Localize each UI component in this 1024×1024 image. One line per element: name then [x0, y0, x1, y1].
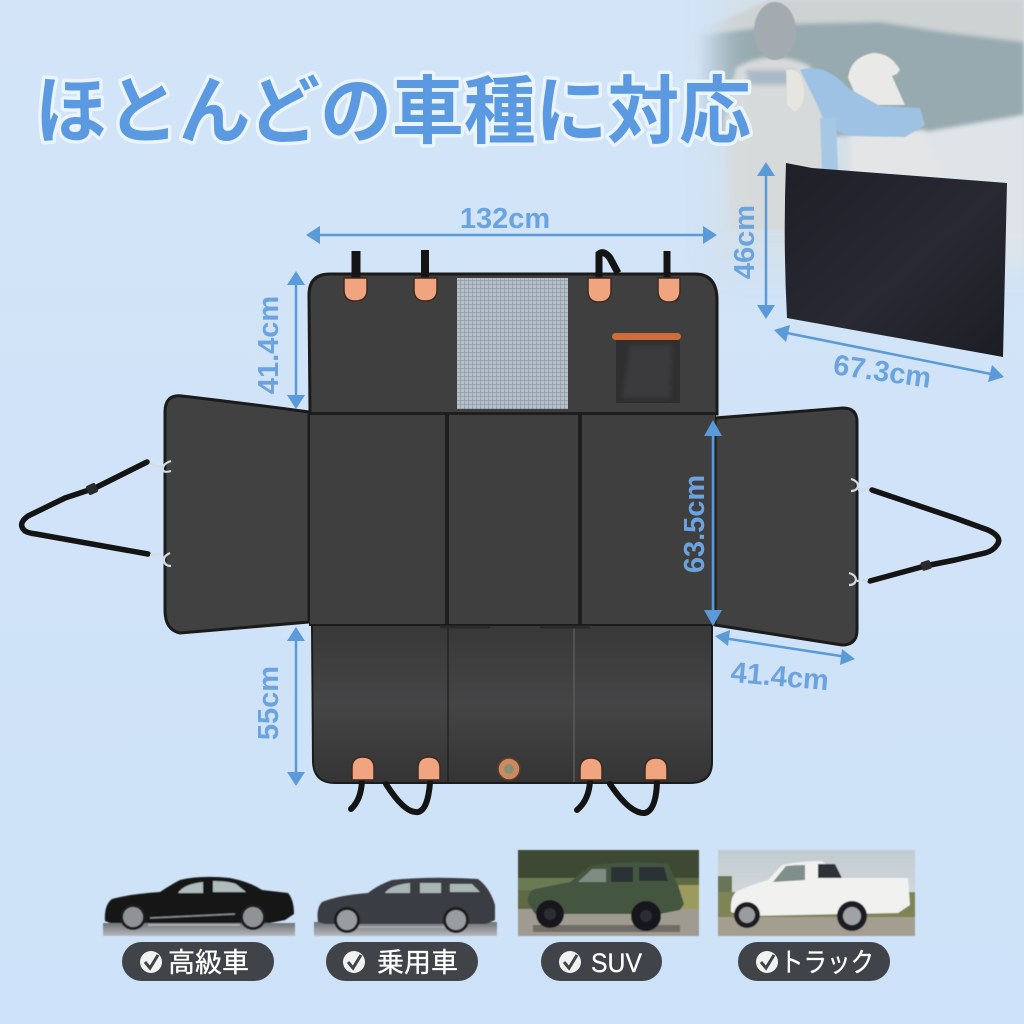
dimension: upper height 41.4cm: 41.4cm	[253, 296, 285, 394]
dimension: width 132cm: 132cm	[460, 203, 550, 235]
mesh window	[457, 278, 568, 409]
sleeve	[800, 68, 925, 137]
storage pocket	[612, 333, 681, 403]
badge: SUV	[541, 942, 662, 981]
check icon	[140, 951, 162, 973]
dog head	[848, 53, 905, 105]
round logo tab	[498, 758, 520, 780]
dimension: bag width 67.3cm: 67.3cm	[831, 349, 933, 395]
badge: truck: トラック	[780, 948, 874, 978]
folded storage bag	[785, 163, 1007, 357]
dimension: width 132cm	[306, 203, 717, 244]
badge: passenger car	[326, 942, 478, 981]
badge: luxury car: 高級車	[168, 948, 249, 978]
dimension: seat height 63.5cm	[679, 420, 722, 626]
dimension: bottom length 55cm	[253, 627, 305, 786]
light ground	[900, 115, 1024, 320]
upper peach tabs	[344, 278, 680, 302]
badge: SUV: SUV	[591, 948, 642, 978]
dark forest	[700, 22, 1024, 140]
dimension: bag width 67.3cm	[774, 325, 1004, 395]
car photo: station wagon	[314, 878, 497, 936]
seat cover mat	[22, 250, 999, 813]
car photo: pickup truck	[718, 850, 915, 936]
top back panel	[309, 250, 717, 414]
dog body	[848, 128, 927, 176]
car photo: SUV	[518, 850, 699, 936]
badge: truck	[738, 942, 890, 981]
car photo: luxury sedan	[103, 877, 295, 936]
dimension: flap width 41.4cm	[715, 630, 855, 697]
left side flap	[165, 396, 309, 633]
photo: hiker with dog, faded	[701, 0, 1024, 264]
far hill	[714, 0, 1024, 42]
seat panels	[309, 412, 716, 626]
right side flap	[715, 408, 857, 645]
left side strap with hooks	[22, 461, 171, 566]
bottom panel	[312, 625, 712, 813]
check icon	[343, 951, 365, 973]
check icon	[559, 951, 581, 973]
backpack and torso	[722, 56, 824, 230]
dimension: bag height 46cm	[729, 162, 775, 319]
dimension: bottom length 55cm: 55cm	[253, 666, 285, 740]
hanging strap	[820, 118, 838, 170]
dimension: upper height 41.4cm	[253, 271, 305, 409]
right side strap with hooks	[849, 479, 999, 585]
dimension: bag height 46cm: 46cm	[729, 205, 761, 279]
person head	[754, 2, 796, 60]
title: ほとんどの車種に対応	[35, 70, 751, 153]
check icon	[756, 951, 778, 973]
lower straps	[351, 781, 657, 813]
badge: luxury car	[122, 942, 274, 981]
badge: passenger car: 乗用車	[377, 948, 458, 978]
lower peach tabs	[352, 757, 667, 780]
dimension: seat height 63.5cm: 63.5cm	[679, 475, 711, 573]
dimension: flap width 41.4cm: 41.4cm	[729, 657, 830, 697]
upper straps	[356, 250, 667, 278]
